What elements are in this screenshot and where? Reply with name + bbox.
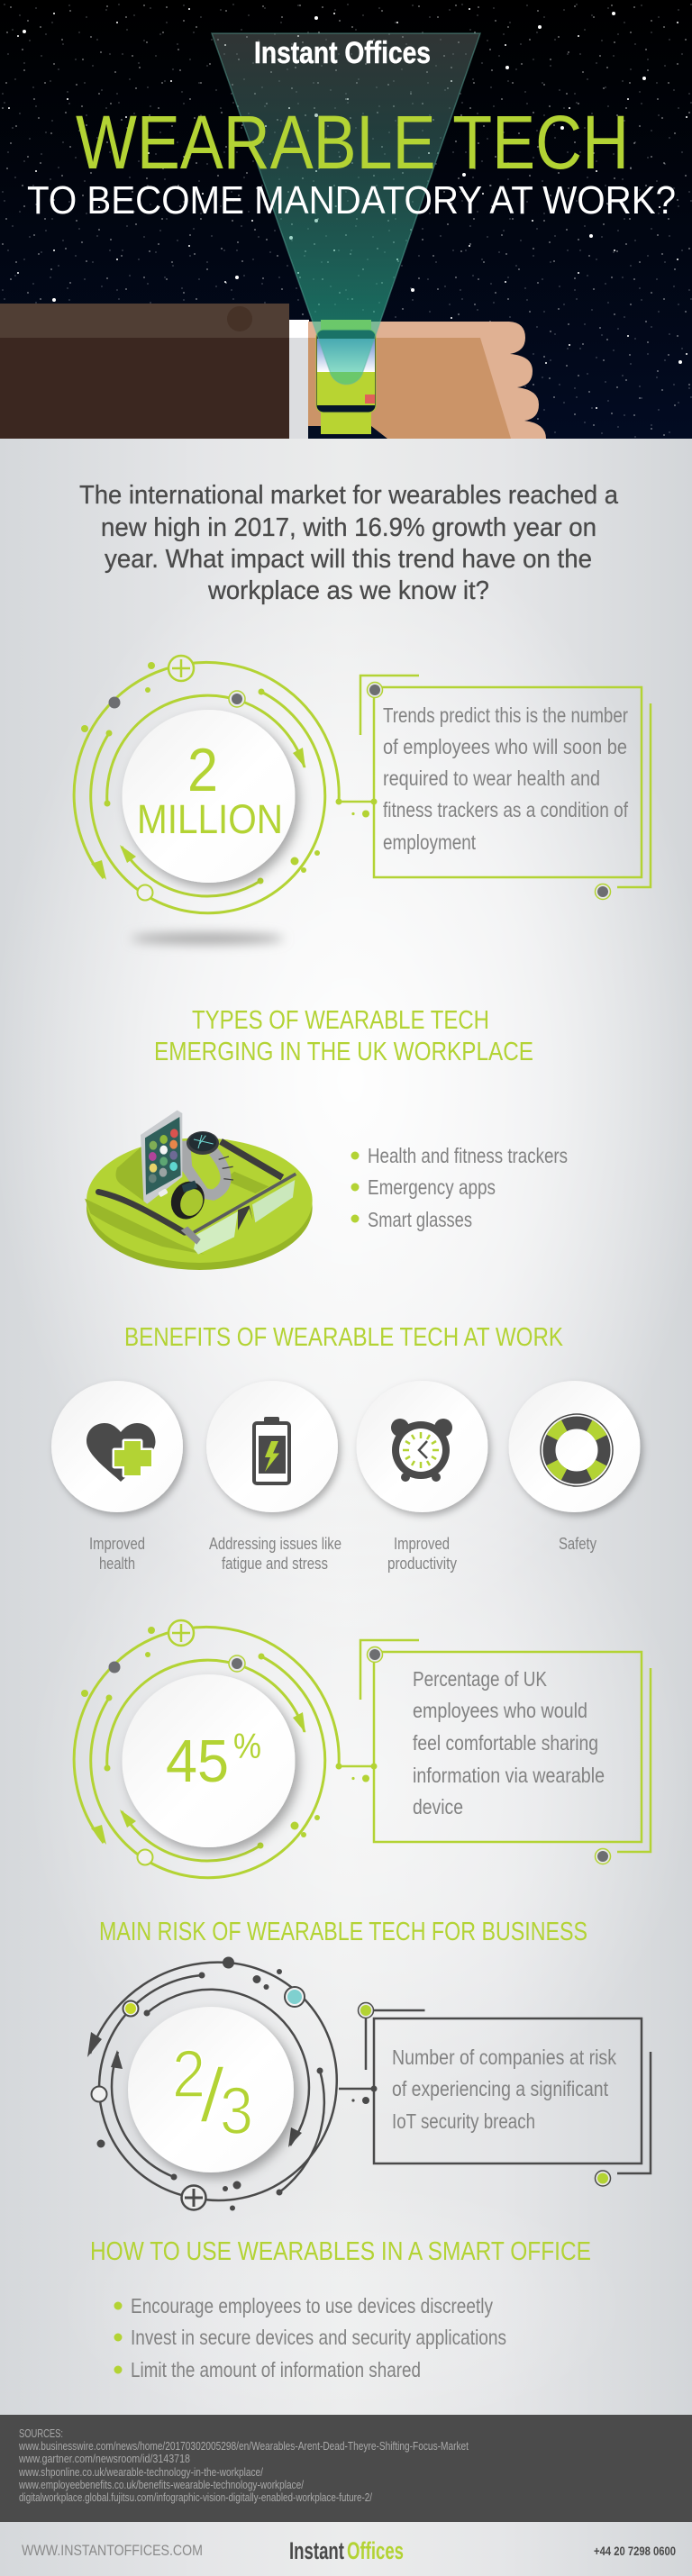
list: wearable types: Emergency apps (368, 1175, 496, 1199)
sources text: SOURCES: (19, 2426, 63, 2440)
sources text: www.gartner.com/newsroom/id/3143718 (18, 2452, 190, 2465)
intro text (79, 481, 619, 605)
benefit: improved health (51, 1381, 183, 1573)
shirt cuff (289, 320, 309, 439)
callout text: fitness trackers as a condition of (383, 798, 628, 821)
value (137, 736, 283, 842)
orbit rings (90, 1963, 337, 2200)
heading: benefits: BENEFITS OF WEARABLE TECH AT WORK (124, 1323, 564, 1352)
plus node (182, 2185, 205, 2210)
starry sky (0, 0, 692, 439)
ring nodes (92, 1987, 305, 2102)
disc (128, 2007, 294, 2172)
heading: types of wearable tech: TYPES OF WEARABLE TECH (192, 1006, 489, 1035)
sources text (18, 2426, 469, 2504)
phone (141, 1111, 182, 1204)
intro text: The international market for wearables reached a (79, 481, 619, 510)
icon: heart with cross (86, 1423, 155, 1482)
label: productivity (387, 1555, 457, 1573)
label: fatigue and stress (222, 1555, 328, 1573)
sources text: www.employeebenefits.co.uk/benefits-wearable-technology-workplace/ (18, 2478, 304, 2491)
intro text: year. What impact will this trend have on the (105, 545, 592, 574)
ring arrows and dots (81, 662, 342, 884)
fitness ring (166, 1176, 210, 1224)
callout text: Percentage of UK (413, 1667, 548, 1691)
platform (85, 1138, 313, 1270)
callout: 45 percent description (339, 1640, 651, 1864)
callout text: device (413, 1795, 463, 1819)
callout text (413, 1667, 605, 1819)
sources text: www.shponline.co.uk/wearable-technology-in-the-workplace/ (18, 2465, 263, 2479)
orbit rings (74, 1627, 339, 1878)
projected light beam (212, 33, 480, 385)
logo: Instant Offices (254, 36, 431, 70)
callout text: employment (383, 830, 476, 854)
stat graphic: two thirds (87, 1956, 337, 2210)
stat graphic: 2 million (74, 656, 341, 944)
smart glasses (98, 1141, 296, 1255)
list: wearable types: Smart glasses (368, 1208, 472, 1231)
footer (22, 2537, 676, 2564)
title (27, 100, 676, 222)
heading: smart office: HOW TO USE WEARABLES IN A SMART OFFICE (90, 2237, 591, 2266)
list: smart office tips (114, 2294, 506, 2381)
footer logo: Offices (347, 2537, 404, 2564)
ring arrows and dots (81, 1627, 342, 1848)
label (209, 1535, 341, 1573)
illustration: wearables on green platform (85, 1111, 313, 1270)
heading: main risk: MAIN RISK OF WEARABLE TECH FOR BUSINESS (99, 1918, 587, 1946)
value: 2 (172, 2036, 205, 2111)
value (172, 2036, 253, 2148)
website: WWW.INSTANTOFFICES.COM (22, 2542, 203, 2559)
value: 45 (166, 1728, 229, 1795)
ring nodes (108, 1655, 245, 1864)
label (387, 1535, 457, 1573)
heading: types of wearable tech: EMERGING IN THE UK WORKPLACE (154, 1038, 533, 1066)
callout text: of employees who will soon be (383, 735, 627, 758)
value: 2 (187, 736, 218, 804)
label: Addressing issues like (209, 1535, 341, 1553)
disc (123, 1674, 296, 1847)
plus node (168, 1620, 194, 1646)
label: Safety (559, 1535, 596, 1553)
sources panel (0, 2415, 692, 2522)
callout text (392, 2045, 616, 2133)
callout: two thirds description (339, 2003, 651, 2186)
callout text: information via wearable (413, 1764, 605, 1787)
callout: 2 million description (339, 676, 651, 899)
label: Improved (394, 1535, 450, 1553)
footer logo: Instant (289, 2537, 344, 2564)
value: MILLION (137, 796, 283, 842)
label: Improved (89, 1535, 145, 1553)
label (89, 1535, 145, 1573)
ring arrows and dots (87, 1956, 323, 2210)
list: smart office tips: Invest in secure devices and security applications (131, 2326, 506, 2349)
benefit: fatigue and stress (206, 1381, 341, 1573)
value: 3 (220, 2073, 253, 2148)
intro text: workplace as we know it? (207, 576, 489, 605)
label: health (99, 1555, 135, 1573)
callout text: Trends predict this is the number (383, 703, 628, 727)
disc (123, 710, 296, 883)
value: % (233, 1728, 261, 1766)
callout text: feel comfortable sharing (413, 1731, 598, 1755)
value: / (200, 2053, 225, 2137)
callout text: Number of companies at risk (392, 2045, 616, 2069)
smartwatch (185, 1131, 233, 1195)
benefit: safety (508, 1381, 640, 1553)
callout text: required to wear health and (383, 766, 600, 790)
list: wearable types (351, 1144, 568, 1231)
plus node (168, 656, 194, 681)
benefit: improved productivity (357, 1381, 488, 1573)
shirt sleeve (0, 304, 289, 439)
orbit rings (74, 662, 339, 913)
smart watch (316, 320, 376, 434)
list: smart office tips: Encourage employees to use devices discreetly (131, 2294, 493, 2317)
footer logo (289, 2537, 404, 2564)
list: smart office tips: Limit the amount of information shared (131, 2358, 421, 2381)
callout text: of experiencing a significant (392, 2077, 609, 2100)
sources text: digitalworkplace.global.fujitsu.com/infographic-vision-digitally-enabled-workplace-future-2/ (19, 2490, 372, 2504)
stat graphic: 45 percent (74, 1620, 341, 1878)
hand (308, 322, 546, 439)
heading: types of wearable tech (154, 1006, 533, 1066)
callout text: IoT security breach (392, 2109, 535, 2133)
icon: alarm clock (391, 1419, 452, 1482)
intro text: new high in 2017, with 16.9% growth year on (101, 513, 596, 542)
callout text: employees who would (413, 1699, 587, 1722)
header: starry night with wrist projecting title (0, 0, 692, 439)
floor shadow (131, 933, 284, 944)
ring nodes (108, 691, 245, 901)
callout text (383, 703, 628, 854)
icon: battery (254, 1417, 289, 1483)
list: wearable types: Health and fitness trackers (368, 1144, 568, 1167)
sources text: www.businesswire.com/news/home/20170302005298/en/Wearables-Arent-Dead-Theyre-Shifting-Focus-Market (18, 2439, 469, 2453)
icon: lifebuoy (538, 1411, 615, 1489)
